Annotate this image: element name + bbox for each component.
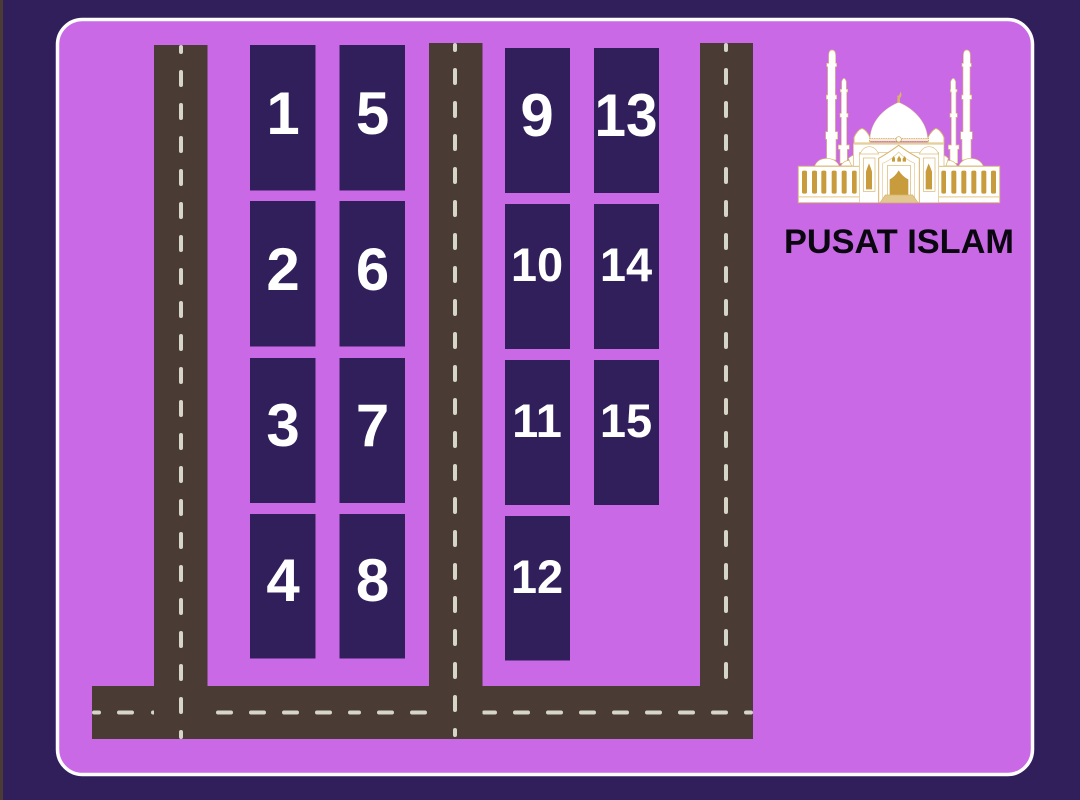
lots: left block (250, 45, 405, 658)
lot 3: 3 (266, 392, 300, 459)
lot 12 (505, 516, 570, 660)
lot 7: 7 (356, 392, 389, 459)
road: bottom horizontal (92, 686, 753, 739)
lot 2 (250, 201, 316, 346)
lot 6: 6 (356, 236, 389, 303)
side domes (815, 154, 983, 166)
lot 4: 4 (266, 547, 300, 614)
lot 5 (340, 45, 405, 190)
lot 7 (340, 358, 405, 503)
lot 1: 1 (266, 80, 300, 147)
main dome (854, 91, 944, 145)
lot 15: 15 (600, 394, 652, 447)
lot 9: 9 (520, 82, 554, 149)
icon: mosque (798, 50, 1000, 203)
central portal (859, 145, 939, 203)
lot 11: 11 (512, 394, 562, 447)
lot 4 (250, 514, 316, 658)
lot 9 (505, 48, 570, 193)
label: Pusat Islam: PUSAT ISLAM (784, 223, 1014, 261)
lot 10: 10 (511, 238, 563, 291)
lot 8: 8 (356, 547, 389, 614)
lot 13: 13 (594, 82, 658, 149)
lot 14 (594, 204, 659, 349)
lot 14: 14 (600, 238, 652, 291)
road network (92, 43, 753, 739)
lot 5: 5 (356, 80, 389, 147)
lot 3 (250, 358, 316, 503)
lot 10 (505, 204, 570, 349)
side wings (798, 166, 1000, 203)
road: left vertical (154, 45, 208, 739)
lot 12: 12 (511, 550, 563, 603)
road: middle vertical (429, 43, 482, 739)
lots: right block (505, 48, 659, 660)
lot 15 (594, 360, 659, 505)
lot 6 (340, 201, 405, 346)
central body (853, 128, 944, 167)
lot 13 (594, 48, 659, 193)
lot 2: 2 (266, 236, 300, 303)
minarets (826, 50, 972, 163)
road: right vertical (700, 43, 753, 739)
lot 11 (505, 360, 570, 505)
lot 8 (340, 514, 405, 658)
lot 1 (250, 45, 316, 190)
